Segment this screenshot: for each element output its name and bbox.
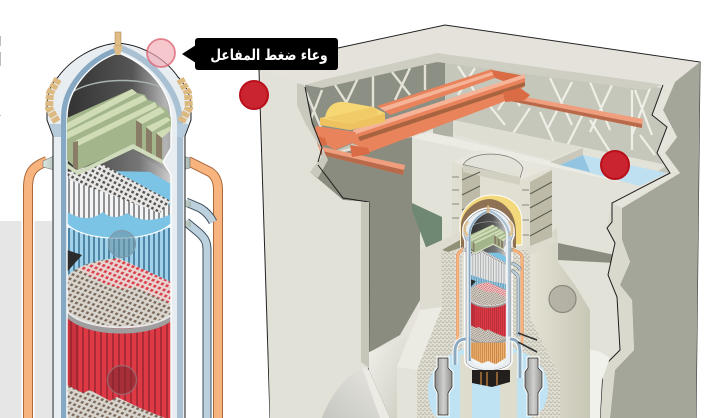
left edge fragments	[0, 36, 1, 116]
interior back wall with truss	[305, 62, 670, 173]
small vessel rods	[471, 253, 506, 284]
background panel	[0, 221, 52, 418]
crane trolley	[320, 102, 385, 130]
reactor head cap	[452, 150, 552, 260]
marker: reactor building grey	[549, 286, 576, 312]
marker: pool red dot	[601, 151, 629, 179]
small vessel lower section	[466, 336, 511, 371]
marker: building red dot	[240, 81, 268, 109]
small vessel pipes	[458, 247, 522, 337]
marker: core	[108, 366, 136, 394]
reactor pressure vessel (small)	[458, 205, 522, 371]
recirculation pump right	[525, 358, 542, 415]
small vessel upper section	[464, 205, 513, 337]
concrete biological shield	[397, 232, 560, 418]
crane rail and bridge	[312, 69, 643, 175]
front beam	[352, 74, 525, 152]
background dome behind left wall	[322, 367, 380, 418]
marker: selected vessel	[147, 39, 175, 67]
recirculation pump left	[435, 358, 452, 415]
rear beam	[377, 69, 525, 115]
drywell liner	[460, 195, 522, 248]
cream reactor building body	[530, 228, 590, 418]
lower pipes small	[455, 333, 537, 378]
callout: reactor pressure vessel: وعاء ضغط المفاعل	[210, 47, 328, 64]
primary and secondary pipes	[28, 154, 218, 418]
building: outer containment structure	[259, 25, 700, 418]
spent fuel pool	[550, 148, 667, 186]
top slab underside	[305, 53, 663, 90]
marker: water level	[108, 230, 136, 258]
vessel cutaway	[47, 32, 191, 418]
small vessel halo	[464, 209, 513, 371]
left rail	[318, 146, 405, 175]
small lower pipe runs	[458, 336, 522, 344]
left wall section	[262, 70, 390, 418]
left inner dark wall	[310, 137, 442, 352]
right rail	[510, 94, 643, 128]
right wall jagged edge	[612, 82, 680, 222]
lower dome right of wall	[369, 337, 407, 418]
control rod housing	[472, 370, 510, 387]
pedestal water pool	[428, 345, 548, 418]
right outer wall	[610, 62, 700, 418]
callout: reactor pressure vessel	[182, 38, 338, 70]
reactor pressure vessel (enlarged)	[28, 32, 218, 418]
central block	[412, 120, 667, 418]
